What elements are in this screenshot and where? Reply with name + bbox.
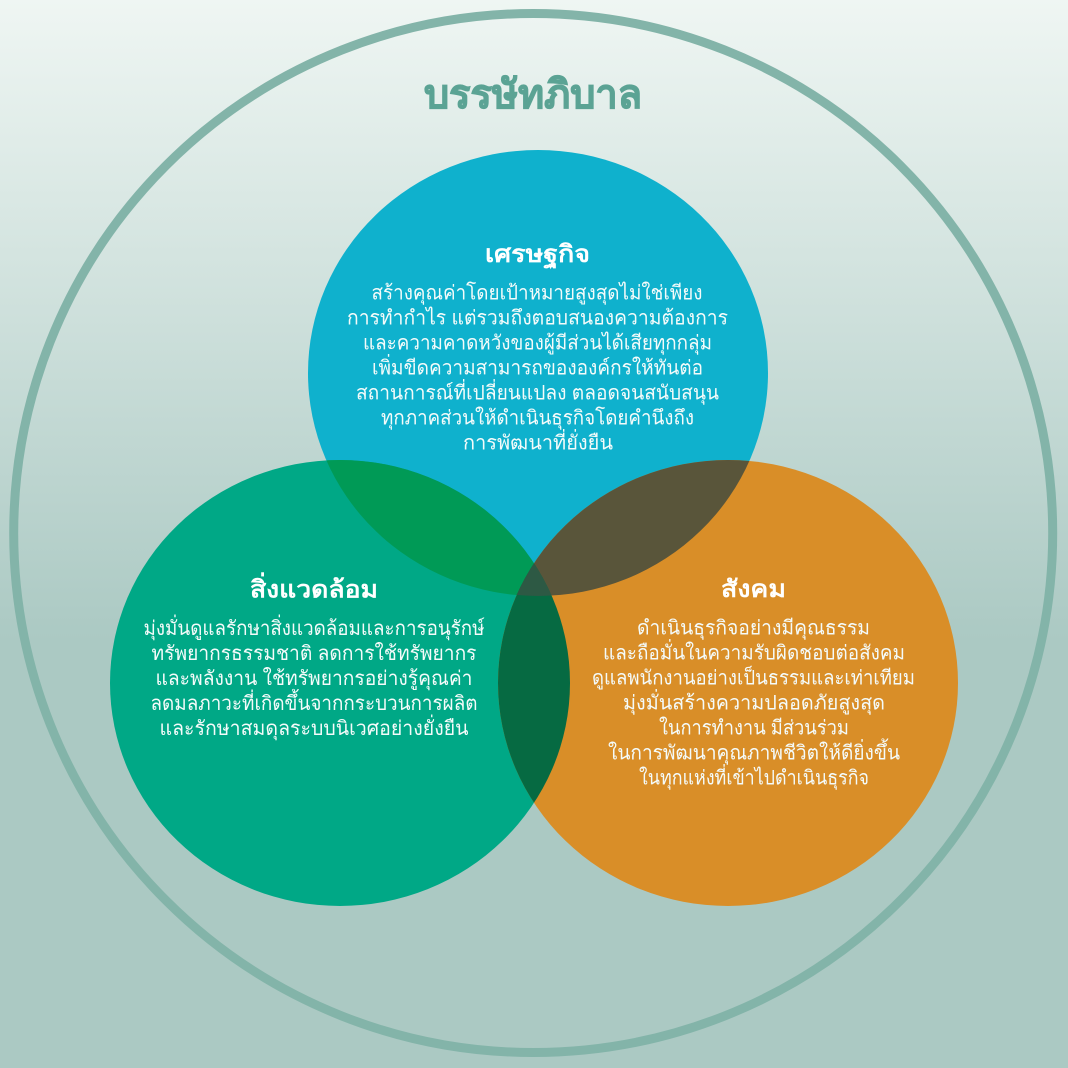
text block: environment: มุ่งมั่นดูแลรักษาสิ่งแวดล้อมและการอนุรักษ์ bbox=[144, 614, 485, 641]
heading: environment: สิ่งแวดล้อม bbox=[250, 572, 378, 604]
panel: economy text bbox=[347, 241, 728, 454]
title: บรรษัทภิบาล bbox=[424, 73, 642, 117]
heading: economy: เศรษฐกิจ bbox=[485, 241, 590, 270]
text block: economy: ทุกภาคส่วนให้ดำเนินธุรกิจโดยคำนึงถึง bbox=[381, 406, 694, 430]
text block: society: และถือมั่นในความรับผิดชอบต่อสังคม bbox=[603, 638, 905, 664]
heading: society: สังคม bbox=[721, 576, 786, 603]
text block: economy: และความคาดหวังของผู้มีส่วนได้เสียทุกกลุ่ม bbox=[363, 332, 712, 356]
text block: society: ดำเนินธุรกิจอย่างมีคุณธรรม bbox=[637, 618, 870, 640]
overlap: economy and environment bbox=[326, 460, 534, 595]
text block: economy: สร้างคุณค่าโดยเป้าหมายสูงสุดไม่ใช่เพียง bbox=[372, 282, 702, 306]
panel: society text bbox=[592, 576, 915, 790]
overlap: environment and society bbox=[498, 564, 570, 802]
overlap: center of all three bbox=[516, 564, 552, 596]
text block: environment: และพลังงาน ใช้ทรัพยากรอย่างรู้คุณค่า bbox=[156, 667, 472, 691]
text block: society bbox=[592, 618, 915, 790]
text block: society: ในการทำงาน มีส่วนร่วม bbox=[659, 716, 849, 740]
text block: society: ในการพัฒนาคุณภาพชีวิตให้ดียิ่งขึ้น bbox=[608, 738, 900, 766]
circle: environment bbox=[110, 460, 570, 906]
text block: environment: และรักษาสมดุลระบบนิเวศอย่างยั่งยืน bbox=[160, 714, 469, 741]
venn diagram bbox=[110, 150, 958, 906]
circle: economy bbox=[308, 150, 768, 596]
panel: environment text bbox=[144, 572, 485, 741]
text block: society: ดูแลพนักงานอย่างเป็นธรรมและเท่าเทียม bbox=[592, 664, 915, 690]
text block: economy bbox=[347, 282, 728, 454]
text block: environment: ลดมลภาวะที่เกิดขึ้นจากกระบวนการผลิต bbox=[150, 689, 478, 715]
circle: society bbox=[498, 460, 958, 906]
text block: economy: การทำกำไร แต่รวมถึงตอบสนองความต้องการ bbox=[347, 306, 728, 330]
text block: society: มุ่งมั่นสร้างความปลอดภัยสูงสุด bbox=[623, 688, 885, 716]
overlap: economy and society bbox=[516, 460, 750, 596]
text block: society: ในทุกแห่งที่เข้าไปดำเนินธุรกิจ bbox=[639, 764, 869, 790]
text block: economy: สถานการณ์ที่เปลี่ยนแปลง ตลอดจนสนับสนุน bbox=[356, 378, 719, 406]
text block: environment: ทรัพยากรธรรมชาติ ลดการใช้ทรัพยากร bbox=[152, 642, 477, 665]
text block: environment bbox=[144, 614, 485, 741]
text block: economy: เพิ่มขีดความสามารถขององค์กรให้ทันต่อ bbox=[372, 354, 703, 380]
text block: economy: การพัฒนาที่ยั่งยืน bbox=[463, 428, 613, 454]
